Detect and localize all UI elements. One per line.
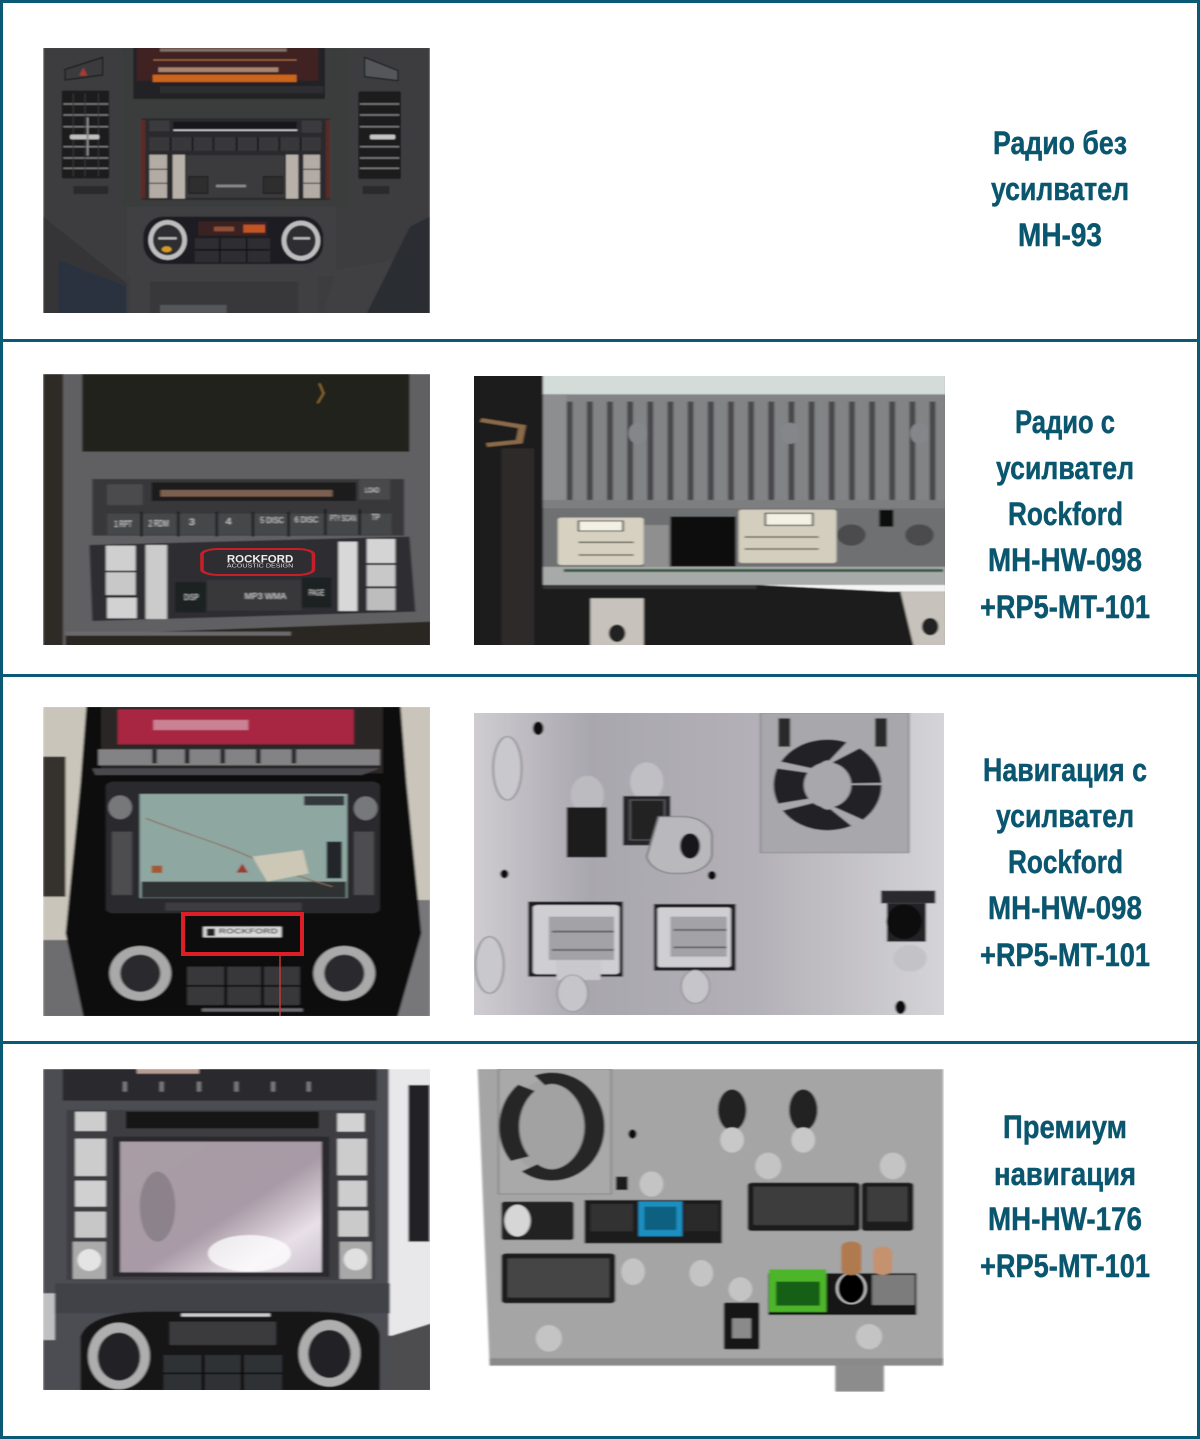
unit faceplate <box>67 1110 375 1280</box>
CD slot row: TP <box>372 512 380 522</box>
heat sink <box>566 394 945 500</box>
heading: navigation with Rockford amplifier: усилвател <box>996 798 1134 834</box>
red rectangle around Rockford badge <box>183 914 302 954</box>
CD slot row: LOAD <box>365 486 379 494</box>
photo: navigation unit front <box>43 707 431 1017</box>
connector left <box>558 518 669 567</box>
photo: dashboard with standard radio <box>43 47 430 314</box>
heading: premium navigation: MH-HW-176 <box>988 1201 1142 1237</box>
touch screen <box>113 1137 329 1277</box>
heading: radio without amplifier: усилвател <box>991 171 1129 207</box>
left vent <box>62 91 109 178</box>
climate control <box>143 217 323 264</box>
round sockets <box>616 1089 906 1197</box>
Rockford logo with red outline <box>202 549 313 575</box>
round antenna socket <box>881 891 936 972</box>
heading: radio without amplifier: MH-93 <box>1018 217 1102 253</box>
heading: navigation with Rockford amplifier: MH-HW-098 <box>988 890 1142 926</box>
CD slot row: 4 <box>226 516 232 526</box>
panel: premium navigation <box>2 1042 1198 1438</box>
photo: radio rear with heat sink and connectors <box>472 372 949 648</box>
heading: navigation with Rockford amplifier: Rockford <box>1008 844 1123 880</box>
fan plate <box>761 713 909 853</box>
CD slot row: 2 RDM <box>149 518 169 528</box>
Rockford logo with red outline: ROCKFORD <box>227 553 293 565</box>
lower control panel <box>89 537 415 621</box>
lower control panel: MP3 WMA <box>245 591 287 601</box>
panel: radio without amplifier <box>2 2 1198 340</box>
photo: Rockford radio front <box>43 374 431 648</box>
red display <box>98 707 383 773</box>
lower control panel: PAGE <box>309 588 324 598</box>
panel: navigation with Rockford amplifier <box>2 676 1198 1042</box>
bottom rail <box>543 567 946 585</box>
heading: premium navigation <box>980 1109 1150 1284</box>
heading: navigation with Rockford amplifier <box>980 752 1150 973</box>
large connector right <box>654 904 736 1003</box>
mounting brackets <box>590 592 946 646</box>
hazard button <box>65 57 103 80</box>
lower control panel: DISP <box>184 592 198 602</box>
heading: radio without amplifier <box>991 125 1129 253</box>
mounting holes <box>533 722 544 735</box>
lower chassis <box>543 508 946 567</box>
USB-style port <box>724 1303 759 1349</box>
CD slot row: 6 DISC <box>294 515 318 524</box>
CD slot row: PTY SCAN <box>330 513 356 523</box>
panel: radio with Rockford amplifier <box>2 340 1198 676</box>
heading: radio with Rockford amplifier: +RP5-MT-101 <box>980 589 1150 625</box>
upper screen <box>133 47 325 99</box>
heading: radio with Rockford amplifier: Rockford <box>1008 496 1123 532</box>
climate knobs <box>109 946 375 1005</box>
large connector left <box>528 902 623 1012</box>
connector row middle <box>501 1200 722 1243</box>
heading: premium navigation: Премиум <box>1003 1109 1127 1145</box>
connector right <box>739 510 836 563</box>
heading: radio with Rockford amplifier <box>980 404 1150 625</box>
photo: navigation unit rear <box>472 712 946 1017</box>
Rockford logo with red outline: ACOUSTIC DESIGN <box>227 563 293 569</box>
CD slot row <box>92 479 404 537</box>
heading: radio with Rockford amplifier: усилвател <box>996 450 1134 486</box>
large lower connector <box>501 1253 615 1303</box>
photo: premium navigation rear <box>478 1069 943 1392</box>
storage tray <box>82 374 410 452</box>
CD slot row: 1 RPT <box>114 519 132 529</box>
CD slot row: 3 <box>189 517 195 527</box>
heading: radio with Rockford amplifier: Радио с <box>1015 404 1115 440</box>
screen bezel <box>106 782 380 913</box>
heading: radio without amplifier: Радио без <box>993 125 1127 161</box>
photo: premium navigation front <box>43 1069 431 1392</box>
green connector and terminals <box>768 1242 917 1315</box>
heading: navigation with Rockford amplifier: +RP5-MT-101 <box>980 937 1150 973</box>
small connectors <box>567 762 712 873</box>
heading: premium navigation: +RP5-MT-101 <box>980 1248 1150 1284</box>
heading: premium navigation: навигация <box>994 1156 1136 1192</box>
right vent <box>358 91 401 179</box>
heading: navigation with Rockford amplifier: Навигация с <box>983 752 1147 788</box>
radio unit <box>141 118 330 200</box>
heading: radio with Rockford amplifier: MH-HW-098 <box>988 542 1142 578</box>
wide connectors <box>748 1183 914 1231</box>
Rockford badge <box>203 927 281 937</box>
climate panel <box>80 1312 380 1392</box>
CD slot row: 5 DISC <box>260 515 284 525</box>
Rockford badge: ROCKFORD <box>219 927 278 935</box>
fan <box>498 1069 611 1194</box>
